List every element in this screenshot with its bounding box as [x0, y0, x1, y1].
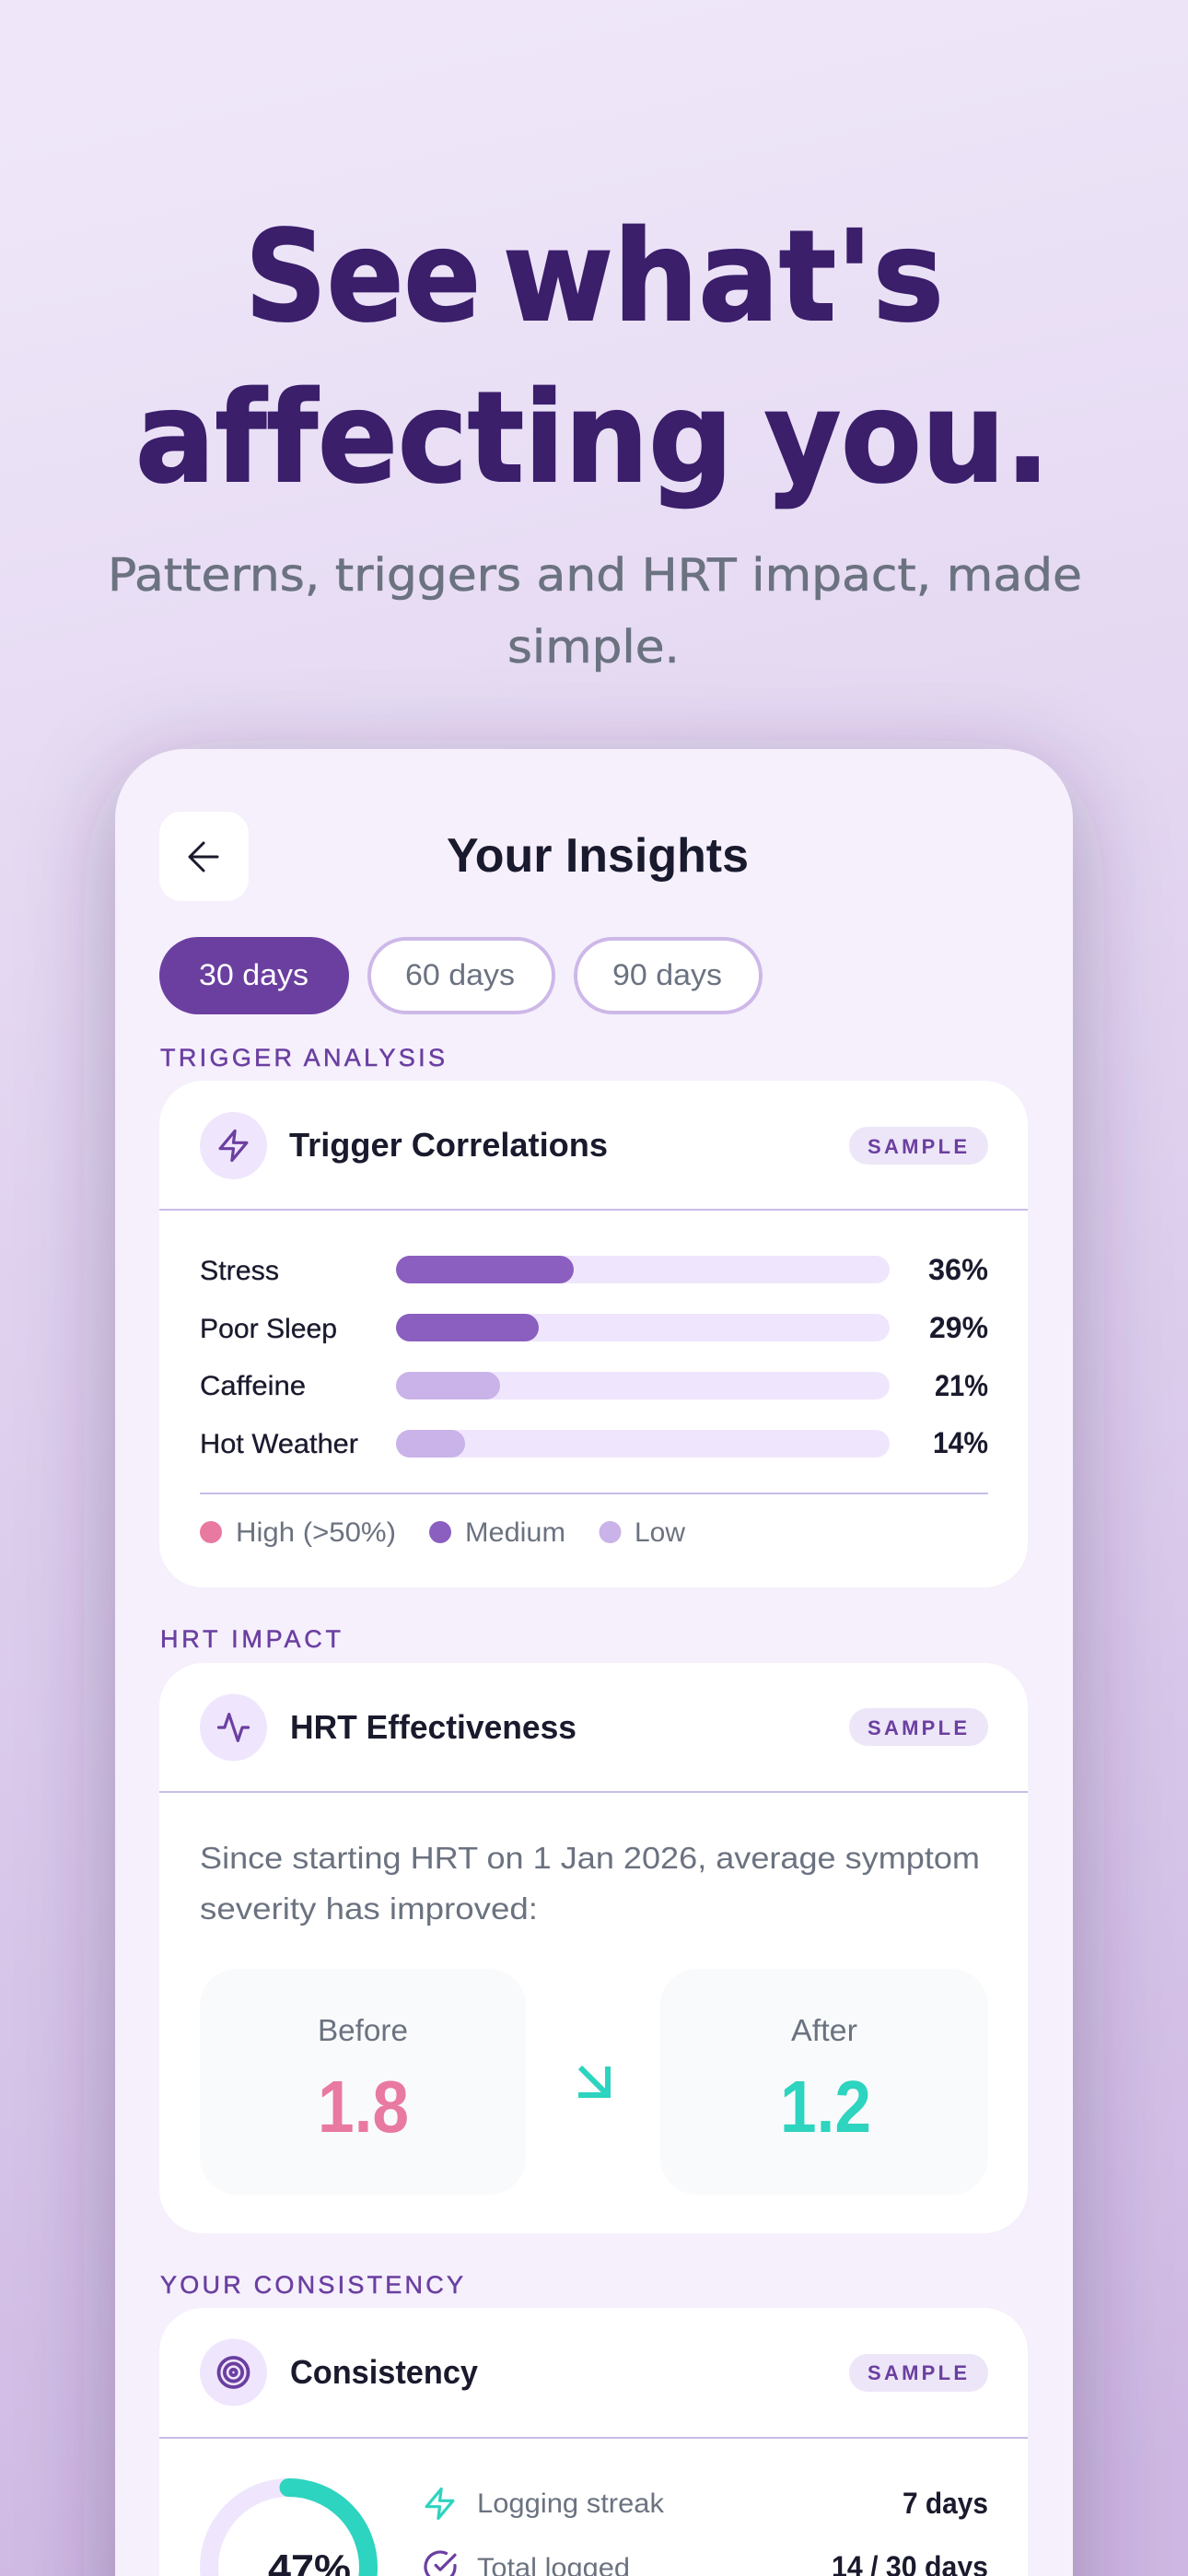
stat: total logged — [425, 2550, 988, 2576]
legend: Low — [635, 1517, 685, 1548]
row: hot weather: Hot Weather — [200, 1429, 358, 1459]
body text: severity has improved: — [200, 1891, 538, 1926]
legend: Medium — [465, 1517, 565, 1548]
card title: Trigger Correlations — [289, 1126, 608, 1164]
headline: you. — [764, 366, 1050, 511]
sample badge — [849, 1708, 988, 1746]
range pill: 60 days — [369, 939, 553, 1013]
before stat — [200, 1969, 526, 2195]
stat: logging streak: 7 days — [903, 2487, 988, 2520]
phone body — [115, 749, 1073, 2576]
sample badge: SAMPLE — [868, 1716, 967, 1739]
sample badge — [849, 2354, 988, 2392]
card title: Consistency — [290, 2353, 478, 2391]
row: hot weather: 14% — [933, 1426, 988, 1459]
before stat: 1.8 — [318, 2066, 409, 2148]
card title: HRT Effectiveness — [290, 1708, 577, 1746]
row: poor sleep: 29% — [929, 1311, 988, 1344]
row: stress — [200, 1253, 988, 1286]
arrow: down-right — [578, 2067, 608, 2095]
sample badge: SAMPLE — [868, 2361, 967, 2384]
stat: logging streak: Logging streak — [477, 2488, 665, 2519]
range pill: 30 days: 30 days — [199, 958, 309, 991]
body text: Since starting HRT on 1 Jan 2026, average symptom — [200, 1841, 980, 1875]
sample badge — [849, 1127, 988, 1165]
icon: bolt — [200, 1112, 267, 1179]
after stat: 1.2 — [780, 2066, 871, 2148]
subtitle — [108, 549, 1082, 673]
donut chart: 47% — [209, 2488, 368, 2576]
back button — [159, 812, 249, 901]
row: caffeine — [200, 1369, 988, 1402]
phone mockup — [115, 749, 1073, 2576]
row: stress: 36% — [928, 1253, 988, 1286]
headline — [135, 205, 1050, 511]
screen title: Your Insights — [447, 829, 749, 883]
bar chart — [200, 1253, 988, 1459]
range pill: 90 days — [576, 939, 761, 1013]
legend: High (>50%) — [236, 1517, 396, 1548]
row: poor sleep: Poor Sleep — [200, 1314, 337, 1344]
after stat: After — [791, 2013, 857, 2047]
section label: hrt impact: HRT IMPACT — [160, 1625, 341, 1653]
subtitle: simple. — [507, 621, 680, 673]
panel: hrt effectiveness — [159, 1663, 1028, 2233]
section label: your consistency: YOUR CONSISTENCY — [160, 2271, 463, 2299]
row: hot weather — [200, 1426, 988, 1459]
row: caffeine: Caffeine — [200, 1371, 306, 1401]
stat: logging streak — [426, 2487, 988, 2520]
headline: affecting — [135, 366, 733, 511]
headline: what's — [503, 205, 944, 350]
after stat — [660, 1969, 988, 2195]
sample badge: SAMPLE — [868, 1135, 967, 1158]
row: stress: Stress — [200, 1256, 279, 1286]
body text — [200, 1841, 980, 1926]
row: poor sleep — [200, 1311, 988, 1344]
legend — [200, 1517, 685, 1548]
icon: activity — [200, 1693, 267, 1762]
icon: target — [200, 2338, 267, 2406]
range pill: 90 days: 90 days — [612, 958, 722, 991]
row: caffeine: 21% — [935, 1369, 988, 1402]
subtitle: Patterns, triggers and HRT impact, made — [108, 549, 1082, 602]
range pill: 30 days — [159, 937, 349, 1014]
before stat: Before — [318, 2013, 408, 2047]
panel: consistency — [159, 2308, 1028, 2576]
section label: trigger analysis: TRIGGER ANALYSIS — [160, 1044, 445, 1071]
headline: See — [245, 205, 481, 350]
range pill: 60 days: 60 days — [405, 958, 515, 991]
panel: trigger correlations — [159, 1081, 1028, 1587]
